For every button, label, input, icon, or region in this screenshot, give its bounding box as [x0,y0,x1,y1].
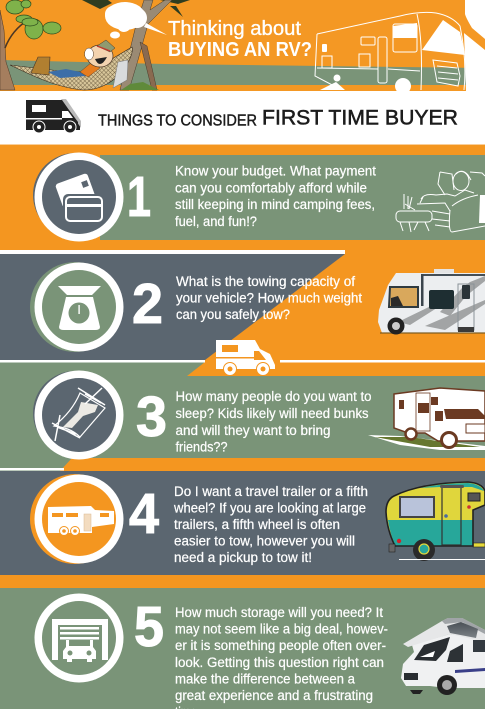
panel: header banner [0,0,485,94]
number 3: 3 [136,385,167,449]
text: step 2 [176,274,362,322]
text: step 2: can you safely tow? [176,307,290,322]
text: step 1: Know your budget. What payment [175,164,376,178]
icon: kitchen scale [58,286,101,330]
icon: garage with car [52,619,108,662]
white corner [464,0,485,91]
text: step 5: er it is something people often over- [175,638,386,653]
text: step 4: easier to tow, however you will [174,534,355,548]
text: step 3 [176,389,372,454]
text: step 5: How much storage will you need? It [175,605,383,620]
text: step 3: sleep? Kids likely will need bunks [176,406,369,421]
heading: first time buyer: FIRST TIME BUYER [262,106,458,130]
text: step 4: trailers, a fifth wheel is often [174,517,340,532]
icon: thought cloud [105,2,167,38]
heading: things to consider: THINGS TO CONSIDER [98,112,257,130]
panel: step 2 towing [0,250,485,376]
text: step 5: look. Getting this question right can [175,655,384,670]
icon: class A motorhome [378,269,485,334]
number 4: 4 [129,482,159,546]
icon: small white camper [216,340,275,376]
text: step 1: still keeping in mind camping fees, [175,197,375,212]
panel: step 3 sleeping [33,370,485,460]
heading: Thinking about buying an RV: BUYING AN RV? [168,39,312,61]
heading: Thinking about buying an RV [168,18,312,61]
panel: background bands [0,145,485,709]
text: step 3: How many people do you want to [176,389,372,404]
icon: camper van [26,99,81,133]
text: step 4: need a pickup to tow it! [174,550,312,565]
motorhome glass and details [320,20,465,94]
icon: hammock [52,388,105,441]
panel: step 5 storage [34,594,485,709]
icon: alcove motorhome [401,618,485,695]
panel: step 4 trailer type [30,474,485,565]
icon: centre tree [82,0,190,90]
text: step 1: can you comfortably afford while [175,180,367,196]
text: step 2: your vehicle? How much weight [176,290,362,306]
text: step 3: friends?? [176,440,228,454]
icon: class C motorhome [368,388,485,450]
number 5: 5 [134,595,164,659]
text: step 2: What is the towing capacity of [176,274,355,289]
text: step 4: Do I want a travel trailer or a fifth [174,484,368,499]
text: step 1 [175,164,376,229]
heading: Thinking about buying an RV: Thinking about [168,18,301,40]
text: step 5: great experience and a frustrating [175,688,373,703]
icon: man in armchair [396,171,485,232]
number 1: 1 [127,165,151,229]
icon: man in hammock [10,40,132,90]
text: step 3: and will they want to bring [176,423,330,438]
text: step 1: fuel, and fun!? [175,214,257,229]
icon: fifth wheel trailer [48,506,114,536]
icon: motorhome outline [315,12,465,90]
text: step 5: make the difference between a [175,672,355,686]
panel: title bar [0,91,485,145]
icon: left tree [0,0,61,90]
text: step 5: may not seem like a big deal, howev- [175,622,388,636]
panel: step 1 budget [33,152,485,242]
text: step 4 [173,484,368,565]
icon: vintage travel trailer [386,482,485,561]
text: step 5 [175,605,388,709]
icon: credit cards [55,173,105,223]
text: step 4: wheel? If you are looking at large [173,500,366,516]
number 2: 2 [132,272,163,336]
